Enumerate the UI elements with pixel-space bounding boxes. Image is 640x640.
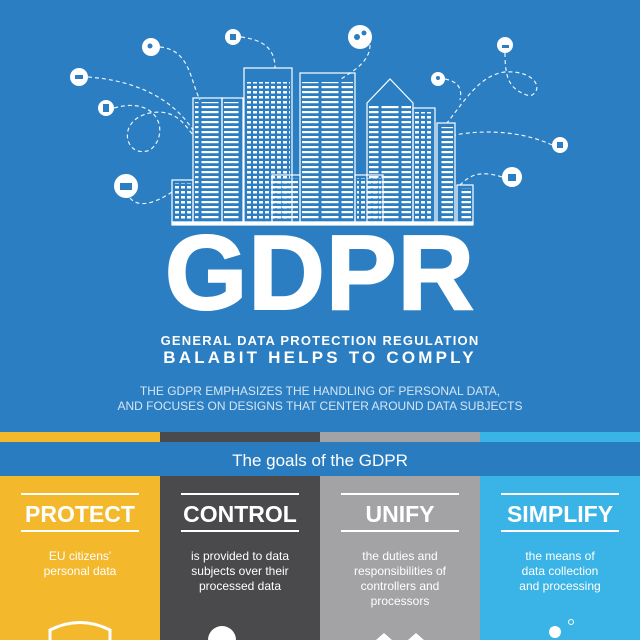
goals heading band <box>0 442 640 476</box>
panel: protect <box>0 476 160 640</box>
panel: protect: personal data <box>44 564 117 578</box>
color stripes <box>0 432 640 442</box>
goals heading band: The goals of the GDPR <box>232 451 408 470</box>
panel: simplify: and processing <box>519 579 601 593</box>
panel: control: subjects over their <box>191 564 289 578</box>
panel: unify: responsibilities of <box>354 564 447 578</box>
panel: unify: UNIFY <box>366 501 434 527</box>
data icons <box>70 25 568 198</box>
panel: protect: PROTECT <box>25 501 135 527</box>
intro text <box>118 384 522 413</box>
panel: simplify: SIMPLIFY <box>507 501 613 527</box>
panel: unify: the duties and <box>362 549 438 563</box>
subtitle: BALABIT HELPS TO COMPLY <box>163 348 477 367</box>
subtitle: GENERAL DATA PROTECTION REGULATION <box>161 333 479 348</box>
intro text: THE GDPR EMPHASIZES THE HANDLING OF PERSONAL DATA, <box>140 384 500 398</box>
skyline illustration <box>172 68 473 225</box>
panel: protect: EU citizens' <box>49 549 111 563</box>
panel: unify: controllers and <box>361 579 439 593</box>
panel: control: is provided to data <box>191 549 289 563</box>
intro text: AND FOCUSES ON DESIGNS THAT CENTER AROUND DATA SUBJECTS <box>118 399 522 413</box>
panel: unify <box>320 476 480 640</box>
panel: simplify: the means of <box>525 549 595 563</box>
panel: unify: processors <box>371 594 429 608</box>
dashed connector lines <box>88 37 552 204</box>
panel: control: processed data <box>199 579 281 593</box>
panel: simplify: data collection <box>522 564 598 578</box>
panel: simplify <box>480 476 640 640</box>
title GDPR: GDPR <box>165 214 475 332</box>
subtitle <box>161 333 479 367</box>
panel: control: CONTROL <box>183 501 297 527</box>
panel: control <box>160 476 320 640</box>
